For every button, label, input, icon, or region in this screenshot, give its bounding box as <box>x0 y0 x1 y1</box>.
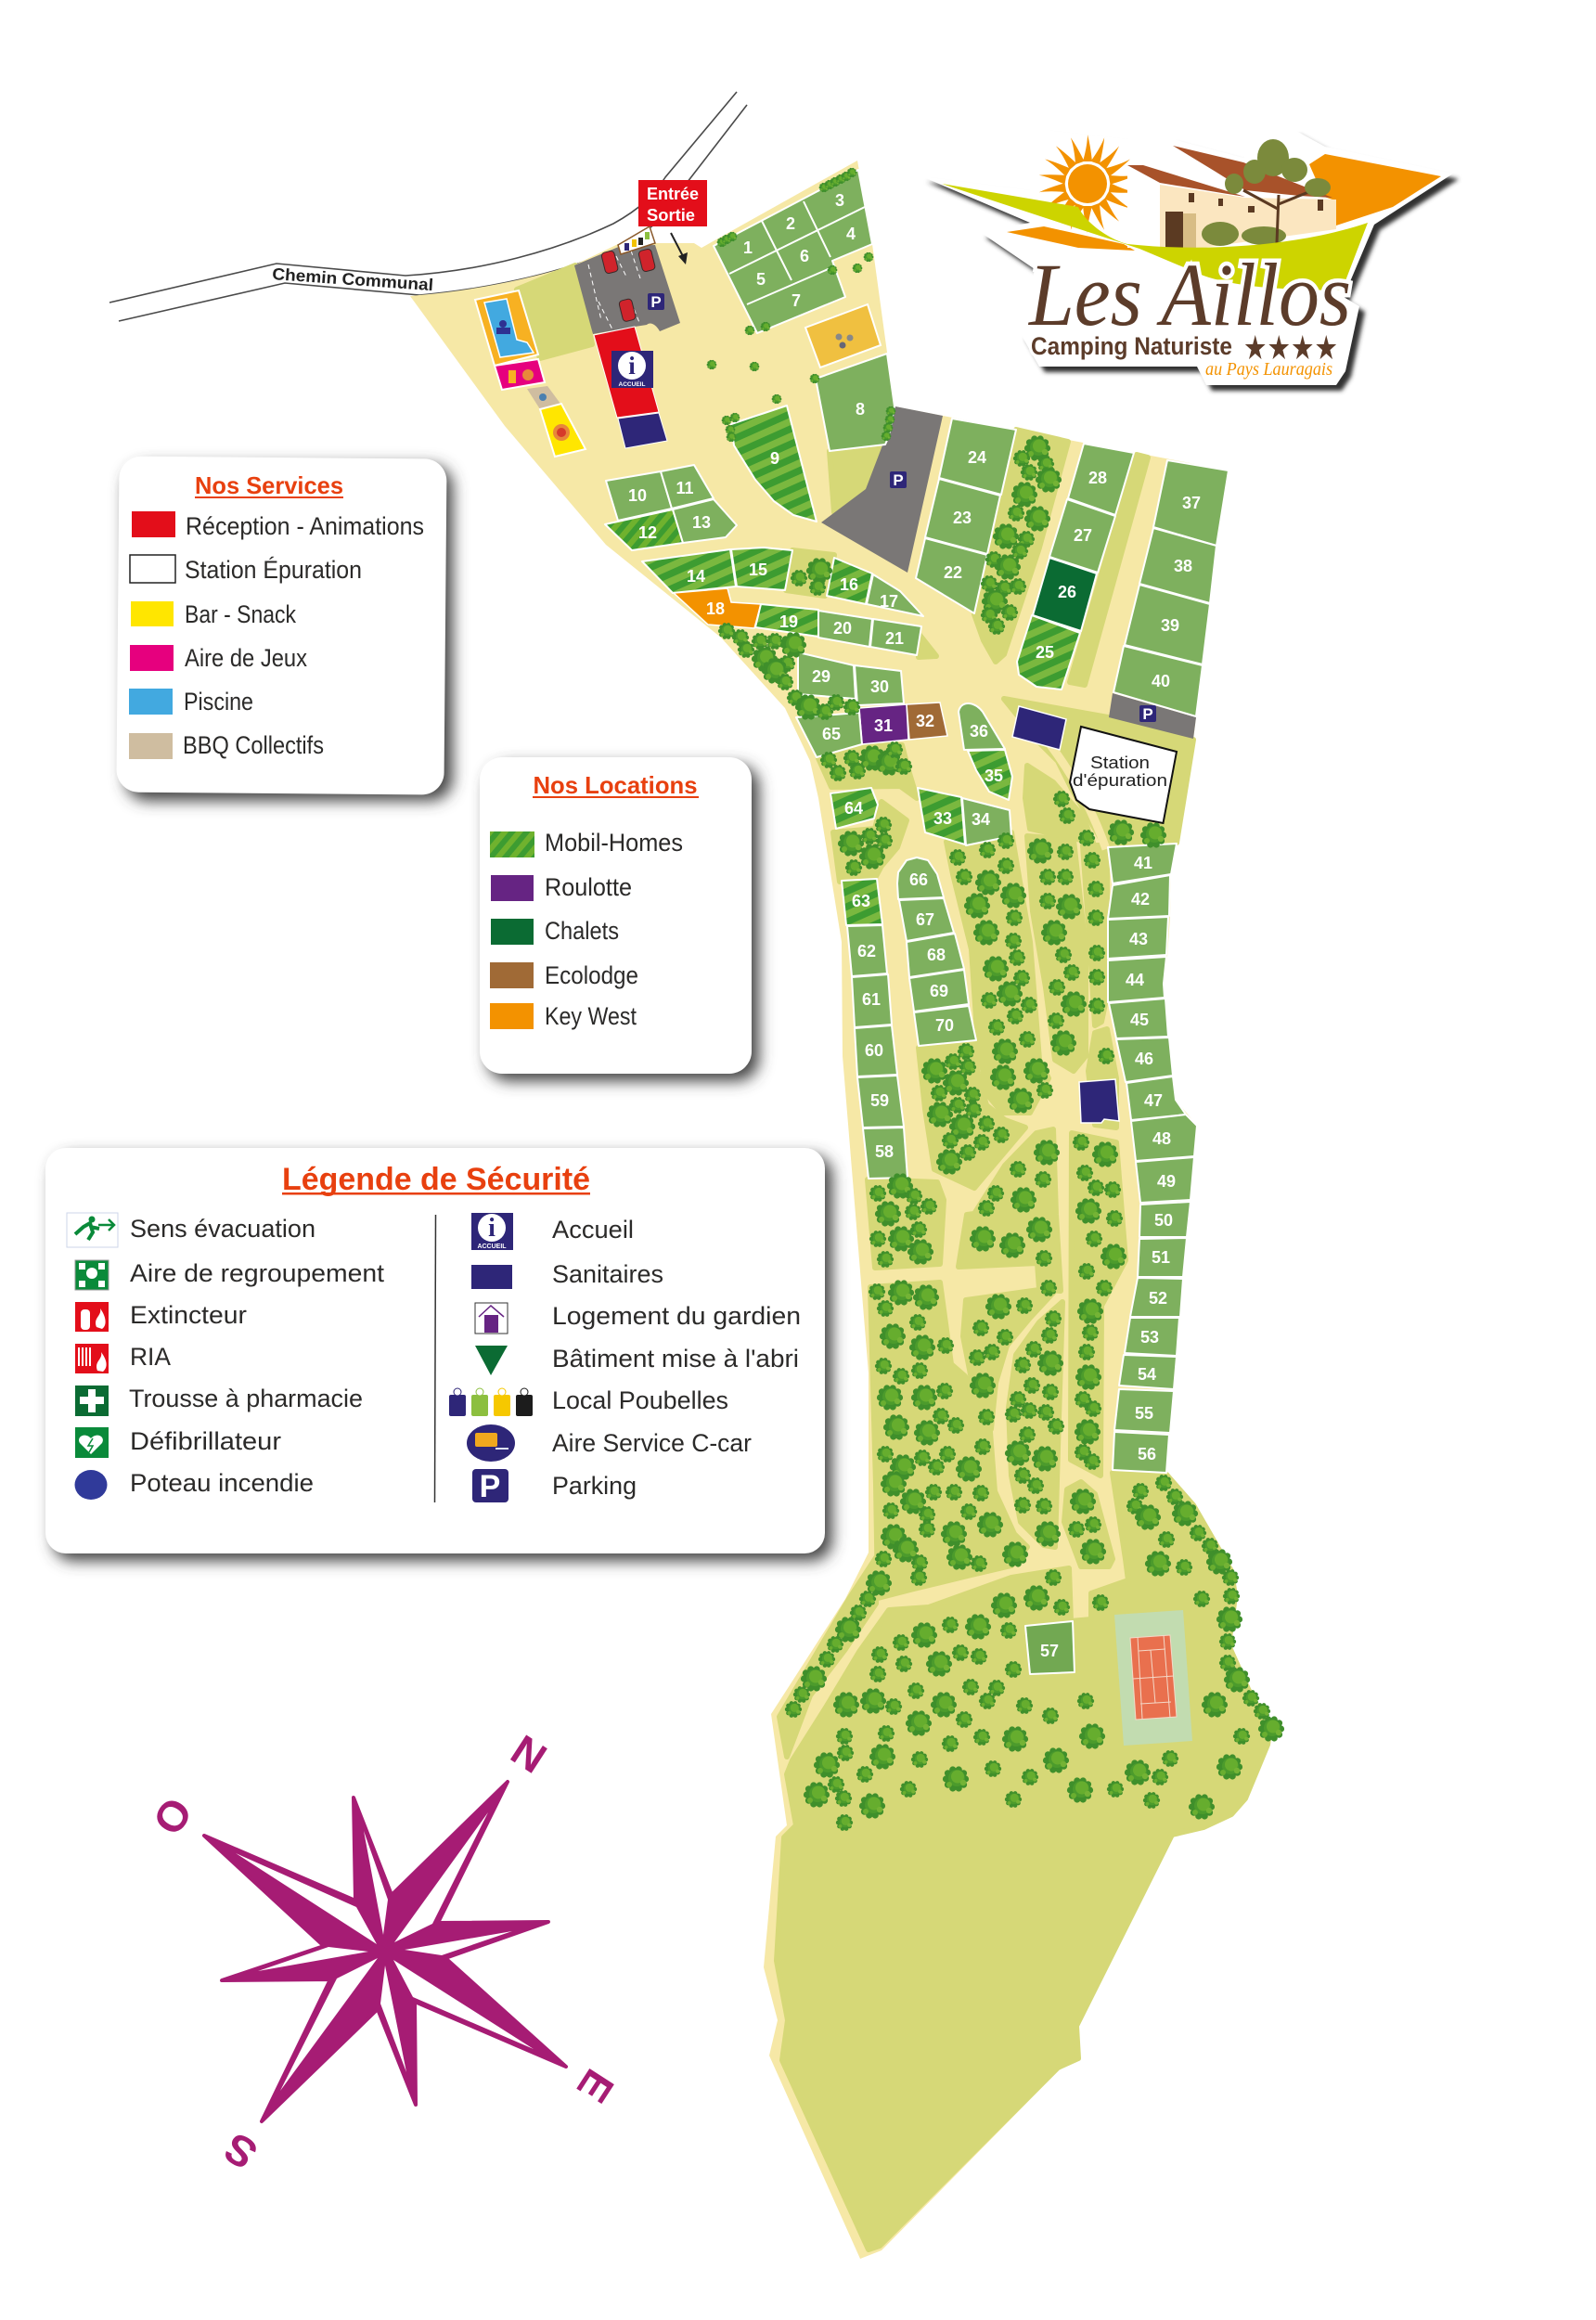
plot 9 <box>731 406 817 522</box>
legend items: Key West <box>545 1002 637 1030</box>
station d'épuration: Station <box>1090 754 1150 772</box>
plots 37-40: 39 <box>1161 616 1179 635</box>
right column labels: Bâtiment mise à l'abri <box>552 1345 799 1373</box>
plots 14-21: 15 <box>749 561 767 579</box>
logo tagline: au Pays Lauragais <box>1205 359 1332 380</box>
plots 58-63: 58 <box>875 1142 894 1161</box>
icon: extinguisher <box>75 1302 109 1332</box>
compass rose: S <box>215 2123 265 2179</box>
cars <box>601 249 656 322</box>
plots 1-7: 5 <box>756 270 766 289</box>
plots 41-56: 48 <box>1152 1129 1171 1148</box>
right column labels: Logement du gardien <box>552 1302 801 1330</box>
plots 58-63: 59 <box>870 1091 889 1110</box>
plots 41-56: 45 <box>1130 1011 1149 1029</box>
icon: fire hose <box>75 1344 109 1373</box>
plots 37-40: 37 <box>1182 494 1201 512</box>
plots 29-36 and 65: 35 <box>985 767 1003 785</box>
BBQ area <box>527 386 560 409</box>
logo green swoosh <box>942 184 1368 290</box>
panel: Nos Services <box>116 456 453 801</box>
plots 29-36 and 65 <box>796 652 1012 845</box>
parking east <box>1109 693 1196 739</box>
plots 29-36 and 65: 34 <box>972 810 990 829</box>
legend items: Piscine <box>184 688 253 715</box>
road: Chemin Communal <box>109 92 747 321</box>
icon: camper service <box>467 1424 515 1462</box>
plots 41-56: 41 <box>1134 854 1152 872</box>
trees <box>707 168 1284 1831</box>
plots 29-36 and 65: 32 <box>916 712 934 730</box>
icon: accueil: i <box>488 1214 496 1243</box>
plots 14-21: 20 <box>833 619 852 638</box>
station d'épuration: d'épuration <box>1073 771 1167 790</box>
heading: Légende de Sécurité <box>282 1162 590 1197</box>
plots 66-70: 67 <box>916 910 934 929</box>
logo orange bands <box>1007 154 1441 251</box>
left column labels: Aire de regroupement <box>130 1259 385 1287</box>
plots 29-36 and 65: 29 <box>812 667 830 686</box>
plots 29-36 and 65: 36 <box>970 722 988 741</box>
plots 1-7: 1 <box>743 238 753 257</box>
logo title: Les Aillos <box>1027 245 1351 344</box>
logo subtitle: Camping Naturiste <box>1031 332 1232 360</box>
main parking <box>821 406 943 573</box>
icon: accueil <box>471 1213 513 1250</box>
plots 29-36 and 65: 31 <box>874 716 893 735</box>
plots 1-7: 3 <box>835 191 844 210</box>
plots 41-56: 55 <box>1135 1404 1153 1423</box>
plots 41-56: 56 <box>1138 1445 1156 1463</box>
plot 8: 8 <box>856 400 865 419</box>
icon: hydrant <box>74 1470 108 1500</box>
playground <box>495 359 545 390</box>
boules court <box>805 304 881 367</box>
plots 41-56: 51 <box>1152 1248 1170 1267</box>
main parking: P <box>893 471 904 489</box>
plots 41-56: 42 <box>1131 890 1150 909</box>
plots 58-63 <box>842 879 907 1179</box>
right column labels: Accueil <box>552 1216 634 1244</box>
plots 22-28: 22 <box>944 563 962 582</box>
snack bar <box>540 404 586 457</box>
plots 22-28: 27 <box>1074 526 1092 545</box>
left column labels: Extincteur <box>130 1301 247 1329</box>
plots 14-21: 17 <box>880 592 898 611</box>
plots 29-36 and 65: 65 <box>822 725 841 743</box>
plots 1-7: 6 <box>800 247 809 265</box>
plots 41-56: 49 <box>1157 1172 1176 1191</box>
plots 1-7 <box>714 170 872 333</box>
legend items: Mobil-Homes <box>545 829 683 857</box>
legend items: BBQ Collectifs <box>183 731 324 759</box>
icon: accueil: ACCUEIL <box>477 1244 507 1250</box>
legend items <box>490 829 683 1030</box>
campsite land <box>410 161 1273 2259</box>
legend items: Bar - Snack <box>185 600 296 628</box>
logo <box>921 130 1459 391</box>
icon: parking: P <box>480 1469 500 1504</box>
icon: evacuation <box>67 1213 118 1247</box>
plots 41-56: 53 <box>1140 1328 1159 1347</box>
plots 29-36 and 65: 64 <box>844 799 863 818</box>
right column labels: Parking <box>552 1472 637 1500</box>
plots 22-28: 26 <box>1058 583 1076 601</box>
plots 10-13: 12 <box>638 523 657 542</box>
heading: Nos Locations <box>533 771 698 799</box>
plot 8 <box>816 354 895 451</box>
icon: accueil: i <box>628 352 636 380</box>
legend items: Aire de Jeux <box>185 644 307 672</box>
plots 37-40 <box>1113 460 1229 716</box>
left column labels: Défibrillateur <box>130 1427 281 1455</box>
plots 14-21: 14 <box>687 567 705 586</box>
icon: first aid <box>75 1386 109 1416</box>
plots <box>605 170 1229 1674</box>
icon: guardian house <box>475 1303 508 1334</box>
icon: sanitaires <box>471 1265 512 1289</box>
plots 14-21 <box>642 548 923 655</box>
legend items: Ecolodge <box>545 961 638 989</box>
plots 10-13: 10 <box>628 486 647 505</box>
plots 1-7: 4 <box>846 225 856 243</box>
plots 14-21: 21 <box>885 629 904 648</box>
reception <box>594 327 667 448</box>
plots 29-36 and 65: 33 <box>933 809 952 828</box>
right column labels: Local Poubelles <box>552 1386 728 1414</box>
light green zones <box>517 265 1269 2249</box>
station d'épuration <box>1070 727 1177 823</box>
plots 66-70 <box>897 857 976 1046</box>
plots 22-28: 24 <box>968 448 986 467</box>
plots 41-56: 54 <box>1138 1365 1156 1384</box>
plots 66-70: 69 <box>930 982 948 1000</box>
plots 41-56: 46 <box>1135 1050 1153 1068</box>
plots 22-28 <box>916 419 1134 690</box>
plots 41-56: 50 <box>1154 1211 1173 1230</box>
entrance sign: Entrée <box>647 185 699 203</box>
right column labels: Sanitaires <box>552 1260 663 1288</box>
icon: accueil <box>611 351 653 388</box>
plots 22-28: 23 <box>953 509 972 527</box>
logo stars: ★★★★ <box>1243 329 1338 367</box>
parking east: P <box>1142 705 1153 723</box>
local poubelles entrance <box>618 226 655 254</box>
plots 1-7: 2 <box>786 214 795 233</box>
legend items <box>129 511 424 759</box>
legend items: Chalets <box>545 917 619 945</box>
right column labels: Aire Service C-car <box>552 1429 752 1457</box>
left column labels: Sens évacuation <box>130 1215 315 1243</box>
compass rose: N <box>503 1725 555 1783</box>
panel: Légende de Sécurité <box>45 1148 832 1561</box>
plots 41-56: 52 <box>1149 1289 1167 1308</box>
plots 14-21: 18 <box>706 599 725 618</box>
plots 41-56 <box>1108 844 1197 1473</box>
parking sign: P <box>650 293 662 311</box>
plots 29-36 and 65: 30 <box>870 677 889 696</box>
plots 41-56: 43 <box>1129 930 1148 948</box>
left column labels <box>129 1215 385 1497</box>
heading: Nos Services <box>195 471 343 499</box>
icon: accueil: ACCUEIL <box>619 381 645 388</box>
logo sun <box>1038 135 1137 233</box>
plots 58-63: 60 <box>865 1041 883 1060</box>
compass rose <box>143 1725 624 2179</box>
logo sticker <box>921 130 1459 391</box>
legend items: Station Épuration <box>185 556 362 584</box>
plots 58-63: 61 <box>862 990 881 1009</box>
icon: parking <box>472 1469 508 1504</box>
divider <box>434 1215 436 1502</box>
plot 57: 57 <box>1040 1642 1059 1660</box>
icon: shelter <box>475 1346 508 1375</box>
plots 22-28: 25 <box>1036 643 1054 662</box>
plots 58-63: 62 <box>857 942 876 960</box>
plots 37-40: 40 <box>1152 672 1170 690</box>
icon: assembly point <box>75 1260 109 1290</box>
legend items: Réception - Animations <box>186 512 424 540</box>
sanitaires blocks <box>1012 706 1119 1123</box>
plots 10-13 <box>605 465 737 550</box>
plots 14-21: 19 <box>779 612 798 631</box>
panel: Nos Locations <box>480 757 759 1081</box>
plots 22-28: 28 <box>1088 469 1107 487</box>
entrance sign: Sortie <box>647 206 695 225</box>
left column labels: Poteau incendie <box>130 1469 314 1497</box>
plots 66-70: 68 <box>927 946 946 964</box>
plot 9: 9 <box>770 449 779 468</box>
icon: bins <box>449 1388 533 1416</box>
right column labels <box>552 1216 801 1500</box>
left column labels: RIA <box>130 1343 171 1371</box>
logo house <box>1127 139 1336 249</box>
plots 41-56: 44 <box>1126 971 1144 989</box>
plots 10-13: 11 <box>676 479 694 497</box>
road: Chemin Communal: Chemin Communal <box>272 264 434 294</box>
compass rose: O <box>143 1789 202 1843</box>
plots 58-63: 63 <box>852 892 870 910</box>
plots 37-40: 38 <box>1174 557 1192 575</box>
plots 66-70: 70 <box>935 1016 954 1035</box>
entrance sign <box>638 180 707 226</box>
parking area near entrance <box>574 226 680 334</box>
entry arrow <box>671 233 688 264</box>
pool <box>475 290 538 366</box>
compass rose: E <box>568 2061 624 2111</box>
legend items: Roulotte <box>545 873 632 901</box>
plots 41-56: 47 <box>1144 1091 1163 1110</box>
plots 14-21: 16 <box>840 575 858 594</box>
icon: defibrillator <box>75 1427 109 1458</box>
left column labels: Trousse à pharmacie <box>129 1385 363 1412</box>
plots 1-7: 7 <box>792 291 801 310</box>
plots 66-70: 66 <box>909 870 928 889</box>
plot 57 <box>1025 1621 1075 1674</box>
plots 10-13: 13 <box>692 513 711 532</box>
tennis court <box>1114 1610 1192 1746</box>
